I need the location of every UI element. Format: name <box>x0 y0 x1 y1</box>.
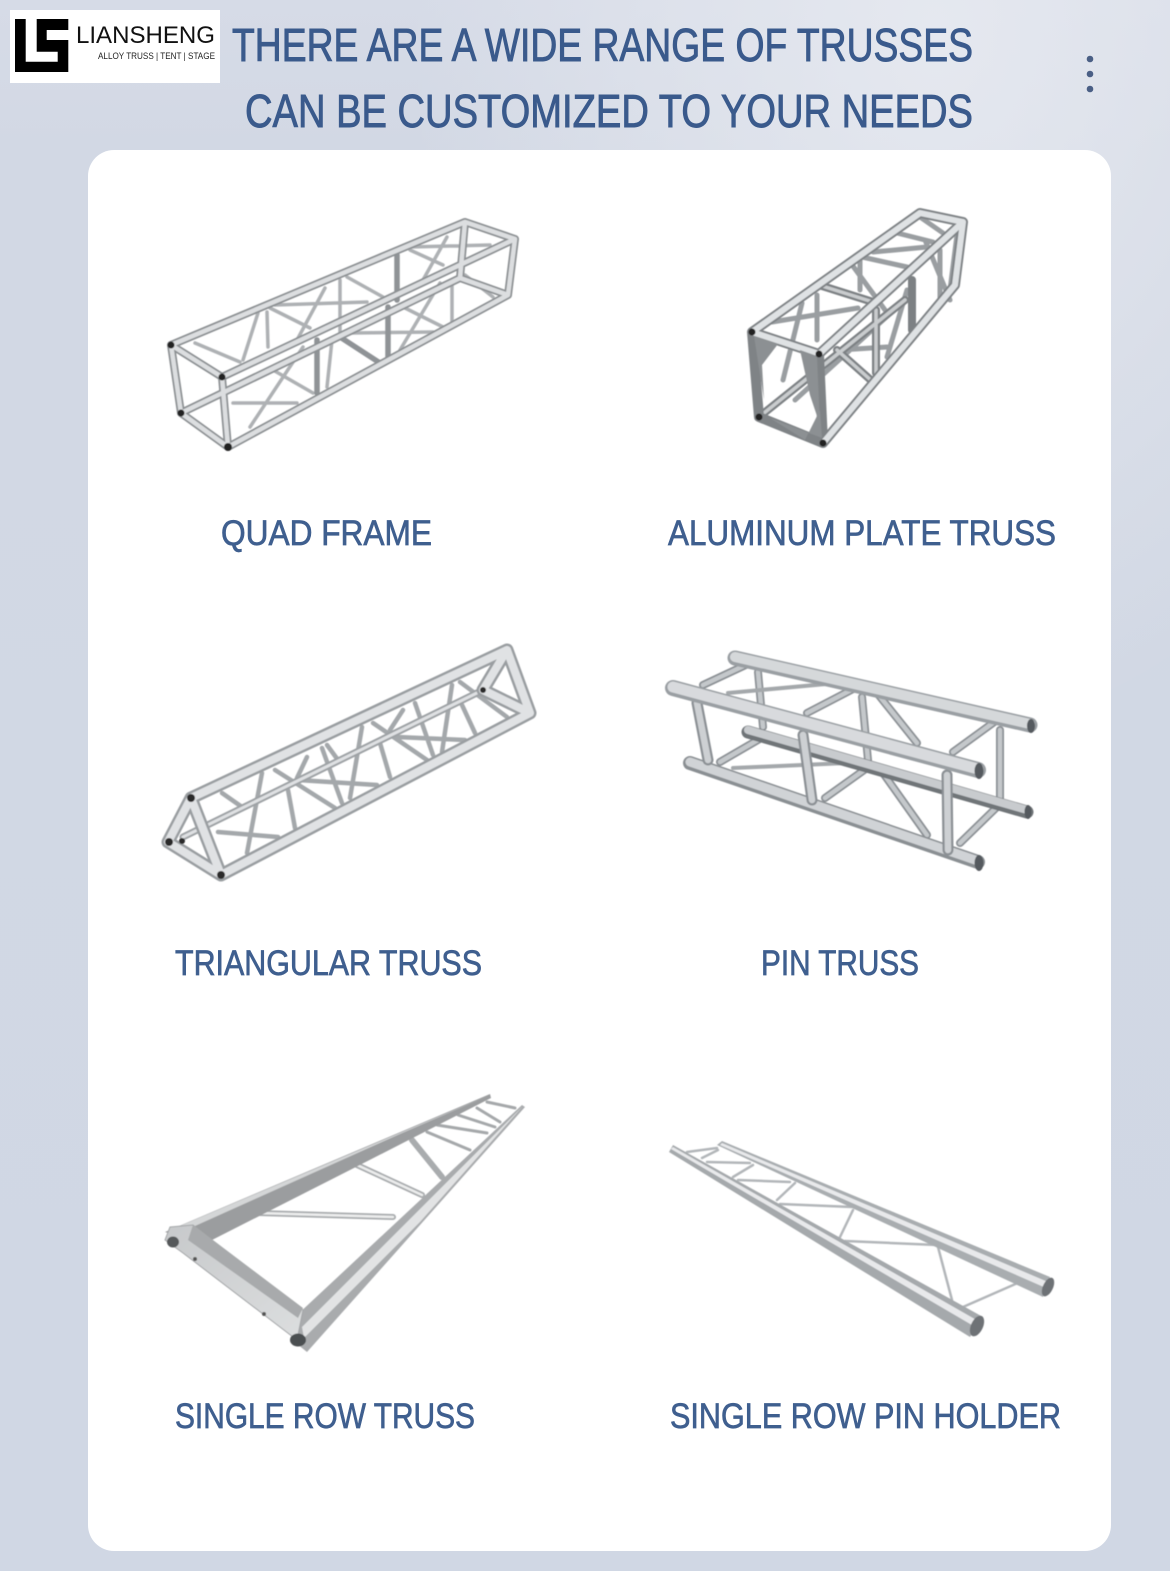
panel: single row truss <box>165 1094 525 1436</box>
logo name: LIANSHENG <box>76 22 215 49</box>
title: CAN BE CUSTOMIZED TO YOUR NEEDS <box>245 85 973 137</box>
panel: quad frame <box>168 222 515 553</box>
label: TRIANGULAR TRUSS <box>175 944 482 983</box>
truss illustration: single row pin holder <box>669 1141 1057 1339</box>
logo mark: LS <box>15 19 68 72</box>
panel: white card <box>88 150 1111 1551</box>
logo <box>10 10 220 83</box>
truss illustration: aluminum plate truss <box>748 213 963 446</box>
panel: triangular truss <box>165 650 530 983</box>
title: THERE ARE A WIDE RANGE OF TRUSSES <box>232 19 973 71</box>
label: QUAD FRAME <box>221 514 432 553</box>
title <box>232 19 973 137</box>
truss illustration: pin truss <box>673 657 1035 871</box>
panel: single row pin holder <box>669 1141 1061 1436</box>
label: ALUMINUM PLATE TRUSS <box>668 514 1056 553</box>
icon: three-dot menu <box>1087 56 1093 92</box>
logo tagline: ALLOY TRUSS | TENT | STAGE <box>98 51 215 62</box>
truss illustration: triangular truss <box>165 650 530 879</box>
truss illustration: single row truss <box>165 1094 525 1352</box>
truss illustration: quad frame <box>168 222 515 451</box>
label: SINGLE ROW TRUSS <box>175 1397 475 1436</box>
label: PIN TRUSS <box>761 944 919 983</box>
panel: pin truss <box>673 657 1035 983</box>
panel: aluminum plate truss <box>668 213 1056 553</box>
label: SINGLE ROW PIN HOLDER <box>670 1397 1061 1436</box>
